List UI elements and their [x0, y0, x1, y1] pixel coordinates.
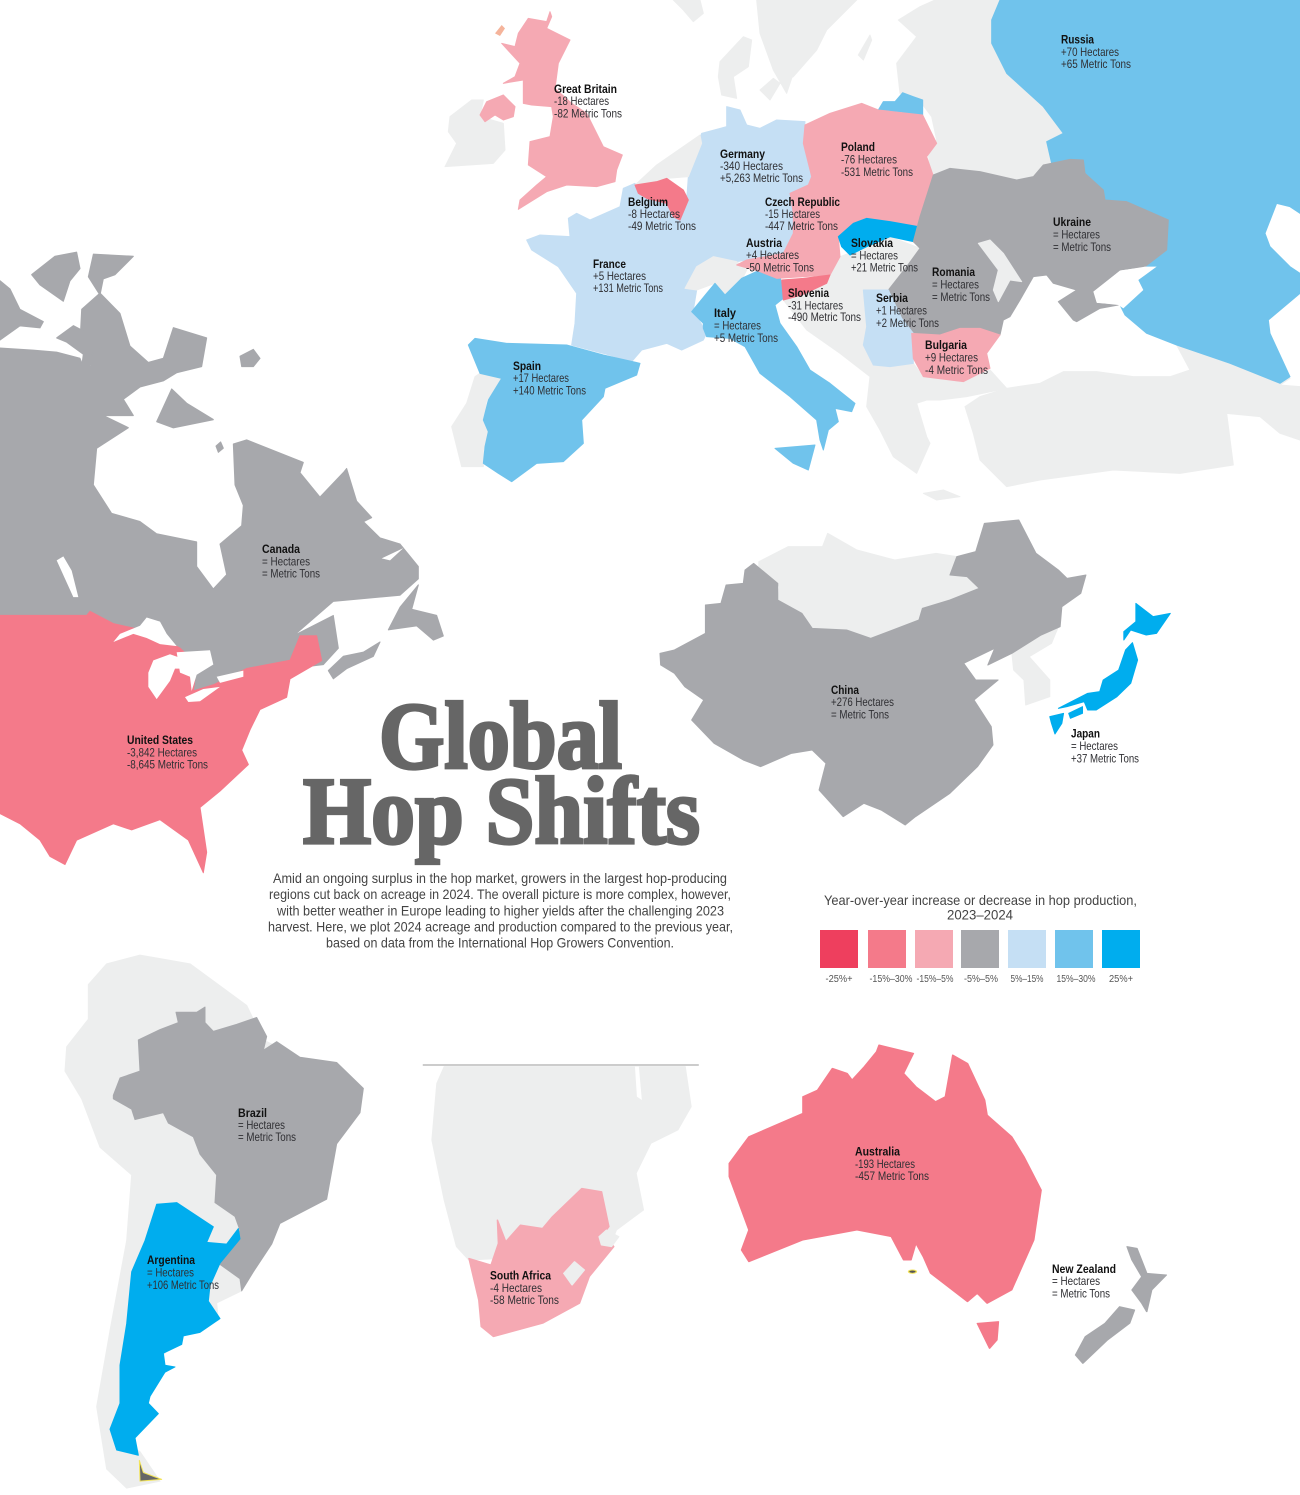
land: Switzerland — [685, 257, 747, 295]
label: France: +5 Hectares — [593, 269, 646, 283]
map: East Asia — [660, 520, 1170, 825]
country: Bulgaria — [912, 328, 1000, 382]
label: Brazil: = Metric Tons — [238, 1130, 296, 1144]
label: Slovakia: Slovakia — [851, 236, 893, 250]
label: Canada — [262, 542, 320, 580]
island: Tierra del Fuego — [139, 1460, 162, 1481]
label: Japan: Japan — [1071, 726, 1100, 740]
water: Lake Michigan — [148, 654, 185, 699]
label: Ukraine: = Metric Tons — [1053, 240, 1111, 254]
country: Serbia — [863, 290, 913, 367]
map: Europe — [445, 0, 1300, 500]
island: Southampton — [157, 389, 213, 428]
label: China: +276 Hectares — [831, 695, 894, 709]
country: South Africa — [469, 1188, 614, 1337]
label: Argentina: Argentina — [147, 1253, 195, 1267]
label: Slovenia: -490 Metric Tons — [788, 310, 861, 324]
island: Kangaroo Island — [909, 1270, 916, 1273]
land: Eswatini — [599, 1230, 619, 1247]
intro text block: based on data from the International Hop Growers Convention. — [326, 934, 674, 950]
land: Denmark — [718, 37, 752, 98]
island: Sicily — [775, 445, 815, 470]
label: Russia: +65 Metric Tons — [1061, 57, 1131, 71]
land: Lesotho — [564, 1262, 584, 1285]
label: United States: -3,842 Hectares — [127, 746, 197, 760]
label: New Zealand: = Metric Tons — [1052, 1286, 1110, 1300]
label: Serbia: +1 Hectares — [876, 304, 927, 318]
country: Japan, Shikoku — [1069, 707, 1083, 718]
label: Poland: Poland — [841, 140, 875, 154]
label: Canada: = Metric Tons — [262, 566, 320, 580]
country: Slovenia — [782, 275, 830, 300]
intro text block: regions cut back on acreage in 2024. The overall picture is more complex, however, — [269, 886, 731, 902]
label: Great Britain: -18 Hectares — [554, 94, 609, 108]
label: New Zealand: = Hectares — [1052, 1274, 1100, 1288]
label: Austria: +4 Hectares — [746, 248, 799, 262]
country: United States — [0, 611, 322, 873]
legend swatch: -15%–5% — [915, 930, 954, 985]
label: Austria — [746, 236, 814, 274]
country: Japan, Honshu — [1058, 643, 1138, 710]
country: Belgium — [635, 178, 688, 220]
label: Argentina — [147, 1253, 219, 1292]
rule above Africa map — [423, 1064, 699, 1065]
label: South Africa: South Africa — [490, 1268, 551, 1282]
label: Belgium: -49 Metric Tons — [628, 219, 696, 233]
label: United States: -8,645 Metric Tons — [127, 758, 208, 772]
island: Victoria — [57, 326, 103, 367]
land: Sweden — [757, 0, 823, 93]
island: Nova Scotia — [328, 642, 380, 679]
title — [303, 683, 700, 864]
land: Mongolia — [759, 533, 979, 638]
map: South America — [65, 955, 363, 1488]
label: Ukraine: Ukraine — [1053, 215, 1091, 229]
label: South Africa: -58 Metric Tons — [490, 1293, 559, 1307]
Oceania shapes — [729, 1045, 1166, 1363]
land: Crete — [923, 490, 960, 500]
label: Czech Republic — [765, 195, 840, 233]
label: New Zealand: New Zealand — [1052, 1262, 1116, 1276]
legend swatch: 5%–15%: 5%–15% — [1010, 974, 1044, 985]
legend title — [824, 892, 1137, 922]
North America shapes — [0, 252, 443, 873]
label: Slovakia — [851, 236, 918, 274]
label: China: China — [831, 683, 859, 697]
water: Lake Winnipeg — [57, 556, 78, 597]
label: Great Britain: Great Britain — [554, 82, 617, 96]
label: Spain: Spain — [513, 359, 541, 373]
legend swatch: 25%+ — [1102, 930, 1140, 985]
label: Romania: Romania — [932, 265, 975, 279]
land: Turkey — [965, 345, 1300, 487]
label: Italy: = Hectares — [714, 318, 761, 332]
country: Canada mainland — [0, 293, 418, 691]
label: Czech Republic: -447 Metric Tons — [765, 219, 838, 233]
label: Poland: -531 Metric Tons — [841, 165, 913, 179]
label: Russia: Russia — [1061, 32, 1094, 46]
label: Czech Republic: Czech Republic — [765, 195, 840, 209]
title: Hop Shifts — [303, 758, 700, 864]
label: France — [593, 257, 663, 295]
label: Canada: Canada — [262, 542, 300, 556]
label: Bulgaria — [925, 338, 988, 377]
legend swatch: -15%–30%: -15%–30% — [870, 974, 913, 985]
legend swatch: -25%+ — [820, 930, 858, 985]
legend swatch: -5%–5% — [961, 930, 999, 985]
label: Japan — [1071, 726, 1139, 766]
region: Kaliningrad — [878, 93, 923, 115]
label: Slovenia: Slovenia — [788, 286, 829, 300]
label: China: = Metric Tons — [831, 708, 889, 722]
label: Serbia: Serbia — [876, 291, 908, 305]
legend title: 2023–2024 — [947, 906, 1013, 922]
label: Brazil — [238, 1106, 296, 1144]
East Asia shapes — [660, 520, 1170, 825]
map: Oceania — [729, 1045, 1166, 1363]
island: Shetland — [495, 25, 505, 36]
label: Spain — [513, 359, 586, 398]
label: South Africa — [490, 1268, 559, 1307]
intro text block: Amid an ongoing surplus in the hop market, growers in the largest hop-producing — [273, 870, 727, 886]
water: Lake Erie — [185, 687, 220, 702]
land: Ireland — [445, 100, 505, 167]
label: Italy: +5 Metric Tons — [714, 331, 778, 345]
country: France and Germany — [527, 107, 812, 362]
legend title: Year-over-year increase or decrease in hop production, — [824, 892, 1137, 908]
region: Northern Ireland — [480, 95, 515, 122]
country: Japan, Hokkaido — [1124, 603, 1170, 640]
label: Romania — [932, 265, 990, 304]
legend — [820, 892, 1140, 985]
country: Brazil — [113, 1007, 363, 1291]
label: Brazil: Brazil — [238, 1106, 267, 1120]
legend swatch: -15%–30% — [868, 930, 913, 985]
map: Southern Africa — [423, 1064, 699, 1337]
country: New Zealand, South Island — [1076, 1307, 1134, 1363]
label: Japan: = Hectares — [1071, 739, 1118, 753]
water: Sea of Azov — [1093, 267, 1157, 308]
label: Italy: Italy — [714, 306, 736, 320]
legend swatch: 5%–15% — [1008, 930, 1046, 985]
land: Baltics and Belarus — [897, 0, 1063, 180]
intro text block — [268, 870, 733, 950]
land: Gotland — [858, 35, 872, 60]
label: France: +131 Metric Tons — [593, 281, 663, 295]
water: Lake Superior — [113, 618, 177, 646]
labels: Europe — [513, 32, 1131, 398]
label: Great Britain — [554, 82, 622, 120]
label: China — [831, 683, 894, 722]
label: Spain: +17 Hectares — [513, 371, 569, 385]
intro text block: harvest. Here, we plot 2024 acreage and production compared to the previous year, — [268, 918, 733, 934]
country: Slovakia — [838, 218, 918, 255]
label: Belgium: Belgium — [628, 195, 668, 209]
country: Argentina — [110, 1203, 240, 1455]
label: Canada: = Hectares — [262, 554, 310, 568]
title: Global — [379, 683, 622, 789]
water: Lake Ontario — [217, 671, 243, 683]
label: Argentina: = Hectares — [147, 1266, 194, 1280]
land: Danish islands — [760, 78, 780, 100]
label: Russia — [1061, 32, 1131, 71]
label: Russia: +70 Hectares — [1061, 45, 1119, 59]
land: Sweden north — [780, 0, 857, 83]
island: Mansel — [216, 442, 223, 452]
label: Australia: Australia — [855, 1144, 900, 1158]
label: New Zealand — [1052, 1262, 1116, 1300]
island: Newfoundland — [388, 585, 443, 640]
country: Great Britain — [502, 12, 622, 209]
label: Serbia: +2 Metric Tons — [876, 316, 939, 330]
island: Tasmania — [977, 1322, 998, 1348]
label: Slovakia: = Hectares — [851, 248, 898, 262]
label: Poland — [841, 140, 913, 179]
label: Bulgaria: +9 Hectares — [925, 350, 978, 364]
country: Japan, Kyushu — [1050, 713, 1064, 734]
label: United States: United States — [127, 733, 193, 747]
label: Austria: Austria — [746, 236, 782, 250]
country: Spain — [468, 338, 640, 482]
label: Slovenia — [788, 286, 861, 324]
land: Balkans — [783, 237, 1007, 473]
land: Portugal — [452, 373, 503, 467]
label: Germany: Germany — [720, 147, 765, 161]
label: Belgium — [628, 195, 696, 233]
legend swatch: 15%–30% — [1055, 930, 1096, 985]
island: Greenland tip — [240, 349, 260, 367]
label: Germany: -340 Hectares — [720, 159, 783, 173]
western Europe shapes — [445, 0, 855, 482]
land: Netherlands — [635, 135, 702, 185]
label: Italy — [714, 306, 778, 345]
label: Brazil: = Hectares — [238, 1118, 285, 1132]
label: Australia: -193 Hectares — [855, 1157, 915, 1171]
label: Japan: +37 Metric Tons — [1071, 752, 1139, 766]
country: Australia — [729, 1045, 1041, 1303]
label: Argentina: +106 Metric Tons — [147, 1278, 219, 1292]
label: Ukraine: = Hectares — [1053, 228, 1100, 242]
intro text block: with better weather in Europe leading to higher yields after the challenging 2023 — [276, 902, 724, 918]
water: Saint Lawrence sliver — [382, 548, 403, 560]
label: Spain: +140 Metric Tons — [513, 384, 586, 398]
country: Italy — [692, 270, 855, 450]
label: Slovakia: +21 Metric Tons — [851, 260, 918, 274]
Southern Africa shapes — [423, 1064, 699, 1337]
water: Lake Huron — [177, 650, 213, 691]
country: China — [660, 520, 1086, 825]
label: South Africa: -4 Hectares — [490, 1281, 542, 1295]
label: Slovenia: -31 Hectares — [788, 298, 843, 312]
label: Czech Republic: -15 Hectares — [765, 207, 820, 221]
label: Ukraine — [1053, 215, 1111, 254]
label: United States — [127, 733, 208, 772]
label: Poland: -76 Hectares — [841, 152, 897, 166]
South America shapes — [65, 955, 363, 1488]
island: Banks — [32, 252, 80, 301]
country: Russia — [992, 0, 1300, 383]
map: North America — [0, 252, 443, 873]
eastern Europe shapes — [737, 0, 1300, 500]
land: Moldova — [978, 240, 1022, 302]
label: Romania: = Metric Tons — [932, 290, 990, 304]
country: New Zealand, North Island — [1127, 1247, 1166, 1312]
water: Lake Malawi — [635, 1067, 642, 1100]
label: Belgium: -8 Hectares — [628, 207, 680, 221]
legend swatch: 25%+: 25%+ — [1109, 974, 1133, 985]
label: Australia: -457 Metric Tons — [855, 1169, 929, 1183]
legend swatch: -25%+: -25%+ — [826, 974, 853, 985]
land: South America continent — [65, 955, 363, 1488]
label: Australia — [855, 1144, 929, 1183]
label: Germany: +5,263 Metric Tons — [720, 171, 803, 185]
island: western Arctic — [0, 281, 43, 340]
label: Serbia — [876, 291, 939, 330]
label: France: France — [593, 257, 626, 271]
label: Bulgaria: -4 Metric Tons — [925, 363, 988, 377]
legend swatch: -5%–5%: -5%–5% — [964, 974, 998, 985]
legend swatch: -15%–5%: -15%–5% — [916, 974, 954, 985]
legend swatch: 15%–30%: 15%–30% — [1056, 974, 1096, 985]
label: Great Britain: -82 Metric Tons — [554, 106, 622, 120]
country: Ukraine and Romania — [888, 159, 1168, 335]
land: Korea — [1012, 627, 1058, 705]
label: Bulgaria: Bulgaria — [925, 338, 967, 352]
land: southern Africa continent — [432, 1067, 691, 1260]
land: Norway — [673, 0, 703, 22]
label: Austria: -50 Metric Tons — [746, 260, 814, 274]
island: Ellesmere — [88, 254, 133, 295]
label: Germany — [720, 147, 803, 185]
country: Poland, Czech Republic and Austria — [737, 103, 939, 278]
label: Romania: = Hectares — [932, 278, 979, 292]
